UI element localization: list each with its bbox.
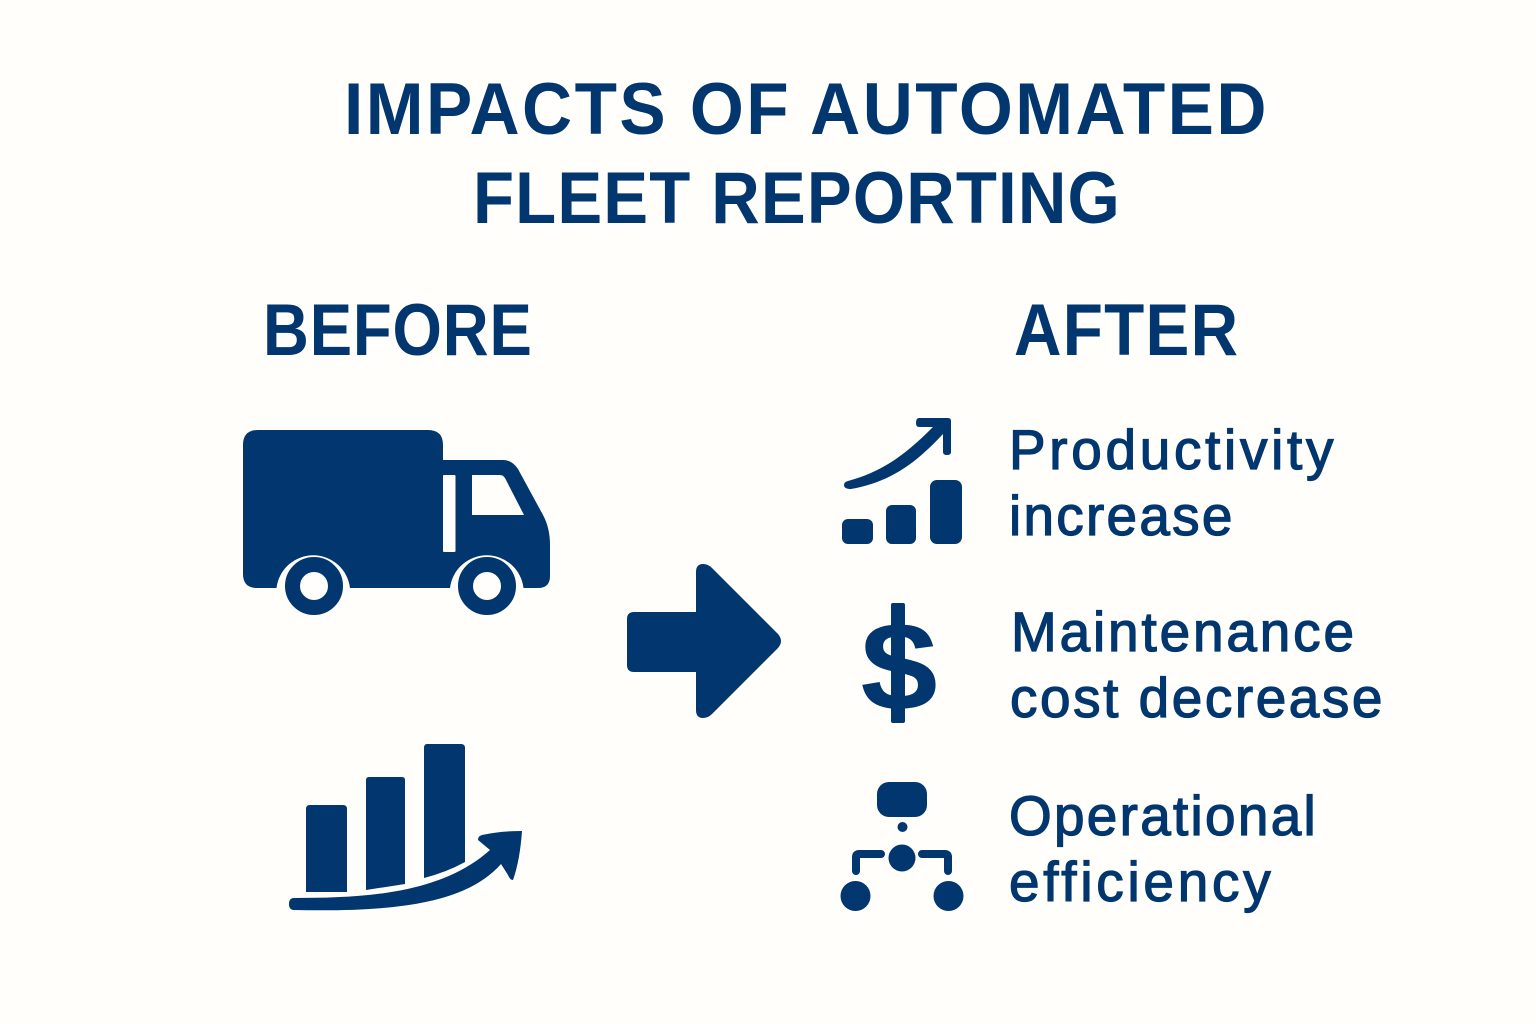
label: operational efficiency: efficiency xyxy=(1009,850,1271,913)
item: maintenance cost decrease xyxy=(860,597,1382,738)
title: FLEET REPORTING xyxy=(473,157,1120,239)
label: maintenance cost decrease: cost decrease xyxy=(1010,666,1382,729)
label: productivity increase xyxy=(1009,418,1334,547)
icon: delivery truck xyxy=(243,430,550,608)
icon: dollar sign: $ xyxy=(860,597,938,738)
icon: bar chart with rising arrow xyxy=(289,744,522,910)
label: productivity increase: increase xyxy=(1009,484,1232,547)
label: operational efficiency: Operational xyxy=(1009,784,1316,847)
arrow: before to after xyxy=(627,564,781,718)
heading: after: AFTER xyxy=(1014,289,1238,371)
icon: process hierarchy xyxy=(840,782,964,911)
title xyxy=(344,69,1266,239)
title: IMPACTS OF AUTOMATED xyxy=(344,69,1266,150)
icon: growth chart xyxy=(842,418,962,544)
label: maintenance cost decrease: Maintenance xyxy=(1011,600,1354,663)
heading: before: BEFORE xyxy=(263,290,532,371)
label: productivity increase: Productivity xyxy=(1009,418,1334,481)
item: productivity increase xyxy=(842,418,1334,547)
label: operational efficiency xyxy=(1009,784,1316,913)
label: maintenance cost decrease xyxy=(1010,600,1382,729)
item: operational efficiency xyxy=(840,782,1316,913)
